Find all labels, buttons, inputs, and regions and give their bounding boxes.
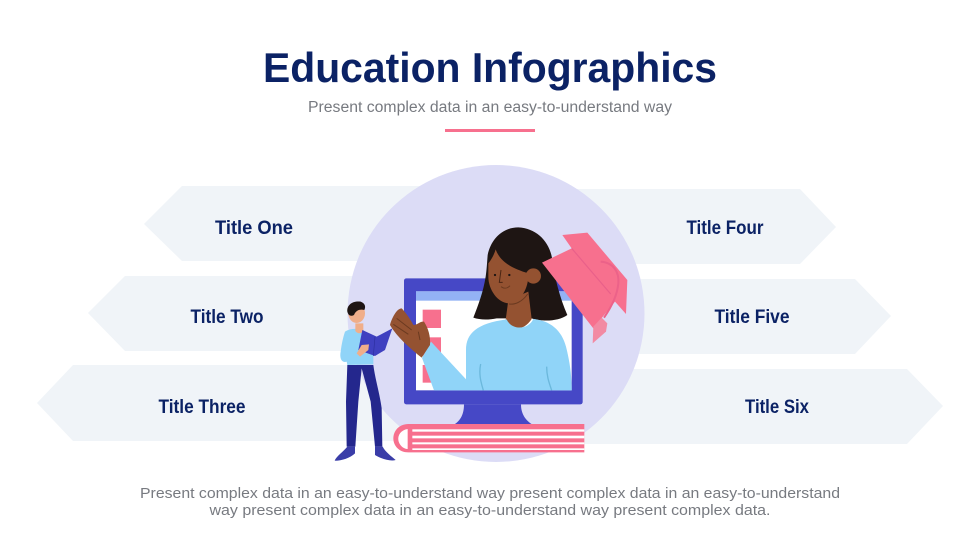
arrow panel: Title One <box>144 186 440 261</box>
arrow panel: Title Two: Title Two <box>190 307 264 328</box>
central illustration <box>335 227 627 461</box>
description line 2: way present complex data in an easy-to-understand way present complex data. <box>208 502 770 519</box>
background circle <box>348 165 644 462</box>
arrow panel: Title Six <box>540 369 943 444</box>
description line 1: Present complex data in an easy-to-understand way present complex data in an easy-to-understand <box>140 485 840 502</box>
icon: monitor <box>404 278 583 404</box>
arrow panel: Title Six: Title Six <box>745 397 809 418</box>
icon: graduation cap <box>542 233 627 343</box>
title underline <box>445 129 535 132</box>
arrow panel: Title Four <box>540 189 836 264</box>
arrow panel: Title Five: Title Five <box>714 307 790 328</box>
title: Education Infographics <box>263 44 717 91</box>
icon: raised hand <box>390 308 430 358</box>
subtitle: Present complex data in an easy-to-understand way <box>308 99 672 116</box>
icon: student with book <box>335 302 396 461</box>
icon: teacher woman <box>390 227 572 390</box>
icon: stacked book <box>393 424 584 452</box>
arrow panel: Title Five <box>540 279 891 354</box>
arrow panel: Title Two <box>88 276 400 351</box>
arrow panel: Title Three <box>37 365 400 441</box>
description text <box>140 485 840 519</box>
arrow panel: Title Three: Title Three <box>158 397 246 418</box>
icon: monitor stand <box>452 404 535 426</box>
arrow panel: Title One: Title One <box>215 218 293 239</box>
arrow panel: Title Four: Title Four <box>686 218 764 239</box>
